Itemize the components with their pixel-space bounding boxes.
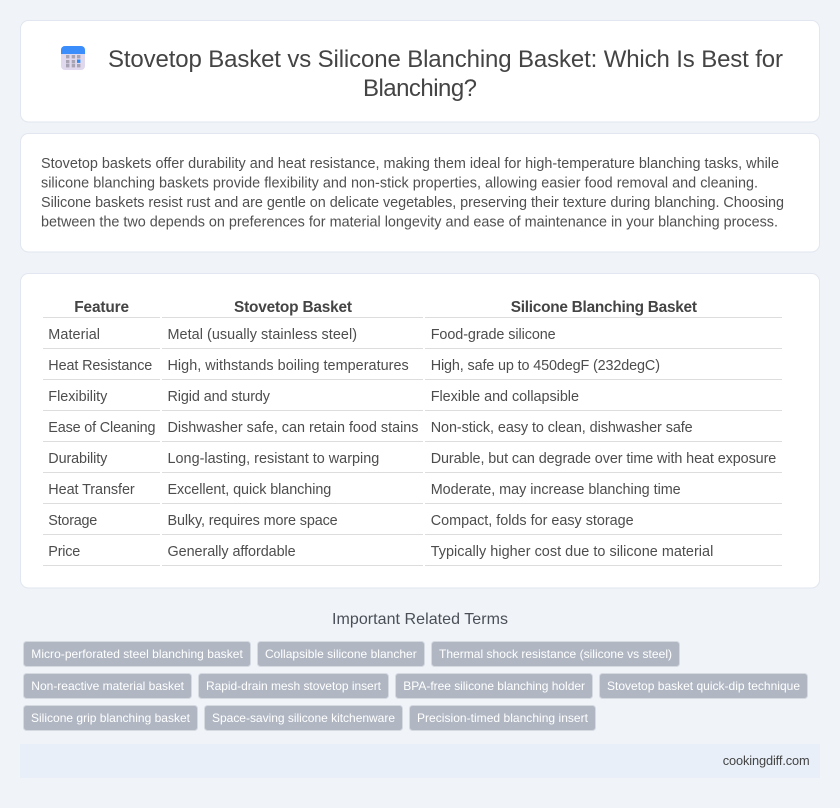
table row: ease of cleaning xyxy=(48,420,693,436)
table row: ease of cleaning: Dishwasher safe, can retain food stains xyxy=(168,420,418,436)
table row: price: Typically higher cost due to silicone material xyxy=(431,544,713,560)
table row: price: Price xyxy=(48,544,80,560)
panel: comparison table xyxy=(20,274,820,588)
table row: durability: Durable, but can degrade over time with heat exposure xyxy=(431,451,776,467)
text block: introduction: silicone blanching baskets provide flexibility and non-stick properties, allowing easier food removal and cleaning. xyxy=(41,176,758,192)
table row: material xyxy=(48,327,556,343)
table row: durability: Long-lasting, resistant to warping xyxy=(168,451,379,467)
table row: storage: Bulky, requires more space xyxy=(168,513,338,529)
tag xyxy=(24,706,198,730)
tag xyxy=(198,674,388,698)
title xyxy=(108,46,783,102)
table row: heat transfer: Heat Transfer xyxy=(48,482,135,498)
text block: introduction xyxy=(41,156,784,230)
table row: heat resistance: High, safe up to 450degF (232degC) xyxy=(431,358,660,374)
table row: storage xyxy=(48,513,634,529)
tag: Space-saving silicone kitchenware xyxy=(212,711,395,725)
table row: price xyxy=(48,544,713,560)
footer source text: cookingdiff.com xyxy=(723,753,810,768)
heading: important related terms: Important Related Terms xyxy=(332,611,508,628)
tag xyxy=(258,642,424,666)
panel: title header xyxy=(20,20,820,122)
tag: Rapid-drain mesh stovetop insert xyxy=(206,679,382,693)
table row: heat transfer: Moderate, may increase blanching time xyxy=(431,482,681,498)
tag: Non-reactive material basket xyxy=(31,679,185,693)
table header: Stovetop Basket xyxy=(234,299,352,316)
tag xyxy=(24,642,250,666)
table row: material: Metal (usually stainless steel) xyxy=(168,327,357,343)
table row: ease of cleaning: Non-stick, easy to clean, dishwasher safe xyxy=(431,420,693,436)
table row: storage: Storage xyxy=(48,513,97,529)
table row: flexibility: Flexible and collapsible xyxy=(431,389,579,405)
footer xyxy=(20,744,820,778)
tag: Silicone grip blanching basket xyxy=(31,711,191,725)
text block: introduction: Silicone baskets resist rust and are gentle on delicate vegetables, preserving their texture during blanching. Choosing xyxy=(41,195,784,211)
icon: calendar xyxy=(61,46,85,70)
table row: flexibility xyxy=(48,389,579,405)
panel: related terms tags xyxy=(24,642,808,730)
table row: material: Food-grade silicone xyxy=(431,327,556,343)
table row: material: Material xyxy=(48,327,100,343)
tag: BPA-free silicone blanching holder xyxy=(403,679,585,693)
title: Stovetop Basket vs Silicone Blanching Basket: Which Is Best for xyxy=(108,46,783,73)
table header: Feature xyxy=(74,299,129,316)
table row: ease of cleaning: Ease of Cleaning xyxy=(48,420,155,436)
title: Blanching? xyxy=(363,75,477,102)
tag xyxy=(24,674,192,698)
tag: Precision-timed blanching insert xyxy=(417,711,589,725)
tag: Stovetop basket quick-dip technique xyxy=(607,679,800,693)
table row: storage: Compact, folds for easy storage xyxy=(431,513,634,529)
table row: durability: Durability xyxy=(48,451,108,467)
tag: Thermal shock resistance (silicone vs steel) xyxy=(439,647,672,661)
table row: heat transfer xyxy=(48,482,681,498)
tag: Micro-perforated steel blanching basket xyxy=(31,647,243,661)
tag xyxy=(204,706,402,730)
table row: flexibility: Flexibility xyxy=(48,389,108,405)
table row: heat transfer: Excellent, quick blanching xyxy=(168,482,331,498)
tag xyxy=(600,674,808,698)
tag xyxy=(432,642,680,666)
table row: heat resistance: Heat Resistance xyxy=(48,358,152,374)
table row: heat resistance: High, withstands boiling temperatures xyxy=(168,358,409,374)
table row: durability xyxy=(48,451,776,467)
table row: price: Generally affordable xyxy=(168,544,296,560)
text block: introduction: between the two depends on preferences for material longevity and ease of maintenance in your blanching process. xyxy=(41,214,778,230)
table header: Silicone Blanching Basket xyxy=(511,299,697,316)
table header xyxy=(74,299,697,316)
tag xyxy=(410,706,596,730)
table row: flexibility: Rigid and sturdy xyxy=(168,389,271,405)
table row: heat resistance xyxy=(48,358,660,374)
panel: introduction xyxy=(20,134,820,252)
tag: Collapsible silicone blancher xyxy=(265,647,417,661)
text block: introduction: Stovetop baskets offer durability and heat resistance, making them ideal for high-temperature blanching tasks, while xyxy=(41,156,779,172)
tag xyxy=(396,674,592,698)
